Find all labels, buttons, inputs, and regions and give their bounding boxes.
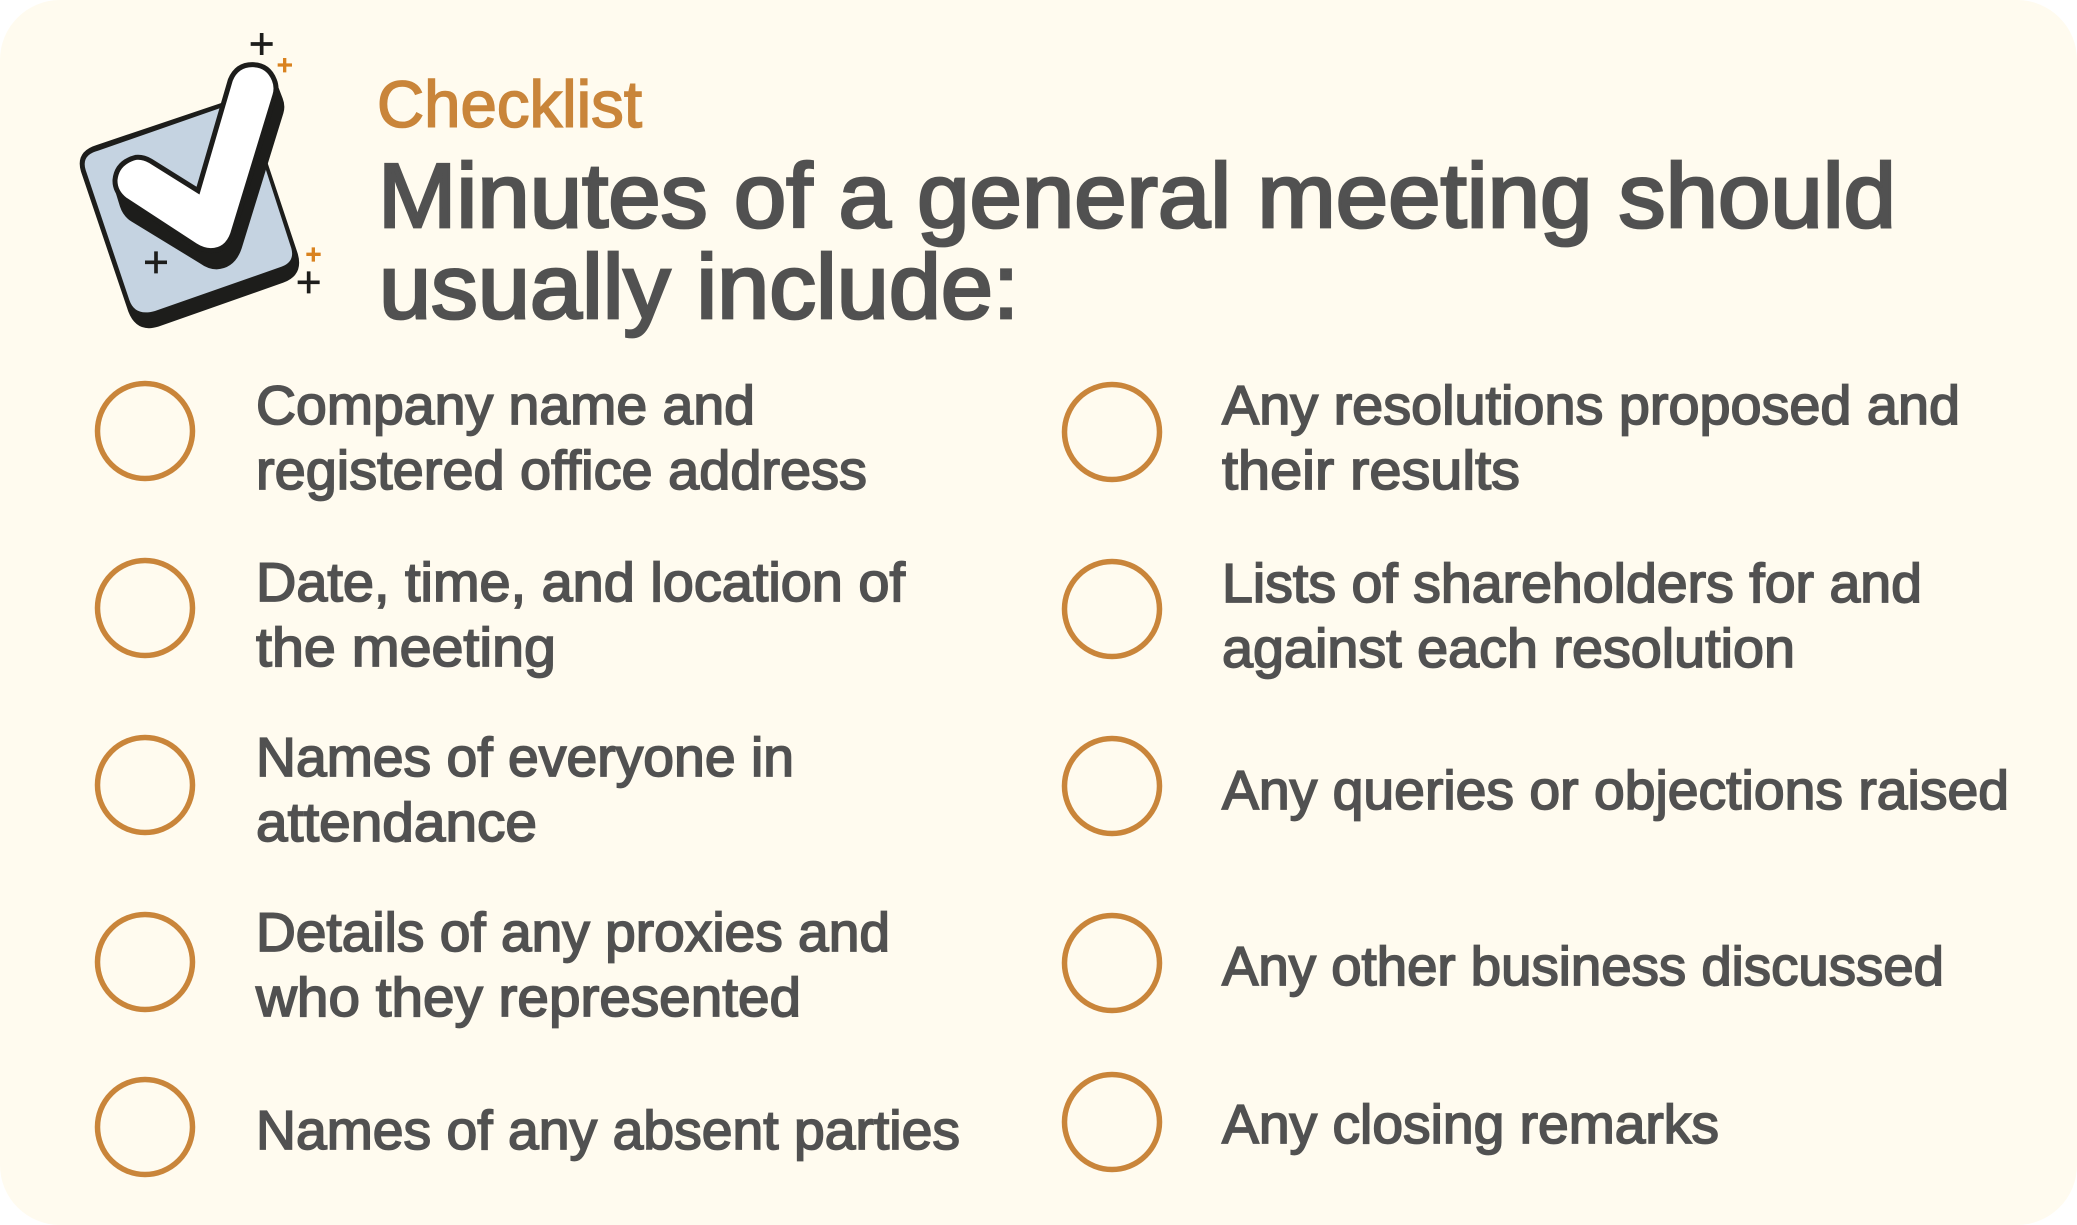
- heading: [378, 146, 1896, 338]
- item: date, time, location: the meeting: [256, 616, 556, 678]
- item: company name: [98, 374, 867, 501]
- item: absent parties: Names of any absent parties: [256, 1099, 960, 1161]
- checkbox face: [85, 100, 292, 312]
- heading: usually include:: [379, 237, 1019, 338]
- item: resolutions: Any resolutions proposed and: [1222, 374, 1960, 436]
- item: company name: Company name and: [256, 374, 755, 436]
- item: resolutions: their results: [1222, 439, 1520, 501]
- item: shareholder lists: [1064, 552, 1922, 679]
- item: other business: Any other business discussed: [1222, 935, 1944, 997]
- item: absent parties: [98, 1080, 960, 1174]
- item: proxies: Details of any proxies and: [256, 901, 890, 963]
- item: resolutions: [1064, 374, 1960, 501]
- item: date, time, location: [98, 551, 906, 678]
- tick shadow: [113, 78, 284, 269]
- item: proxies: [98, 901, 890, 1028]
- item: date, time, location: Date, time, and location of: [256, 551, 906, 613]
- item: attendance: attendance: [256, 791, 537, 853]
- item: queries: Any queries or objections raised: [1222, 759, 2009, 821]
- checkbox body shadow: [80, 95, 299, 328]
- tick: [115, 65, 276, 251]
- item: attendance: [98, 726, 794, 853]
- item: company name: registered office address: [256, 439, 867, 501]
- sparkles: [145, 33, 321, 293]
- heading: Minutes of a general meeting should: [378, 146, 1896, 247]
- eyebrow: Checklist: Checklist: [377, 67, 642, 141]
- item: closing remarks: [1064, 1074, 1719, 1170]
- item: other business: [1064, 916, 1944, 1010]
- item: attendance: Names of everyone in: [256, 726, 794, 788]
- item: closing remarks: Any closing remarks: [1222, 1093, 1719, 1155]
- icon: tilted checkbox with tick: [80, 33, 321, 328]
- item: shareholder lists: Lists of shareholders for and: [1222, 552, 1922, 614]
- item: queries: [1064, 738, 2009, 834]
- item: shareholder lists: against each resolution: [1222, 617, 1795, 679]
- item: proxies: who they represented: [255, 966, 801, 1028]
